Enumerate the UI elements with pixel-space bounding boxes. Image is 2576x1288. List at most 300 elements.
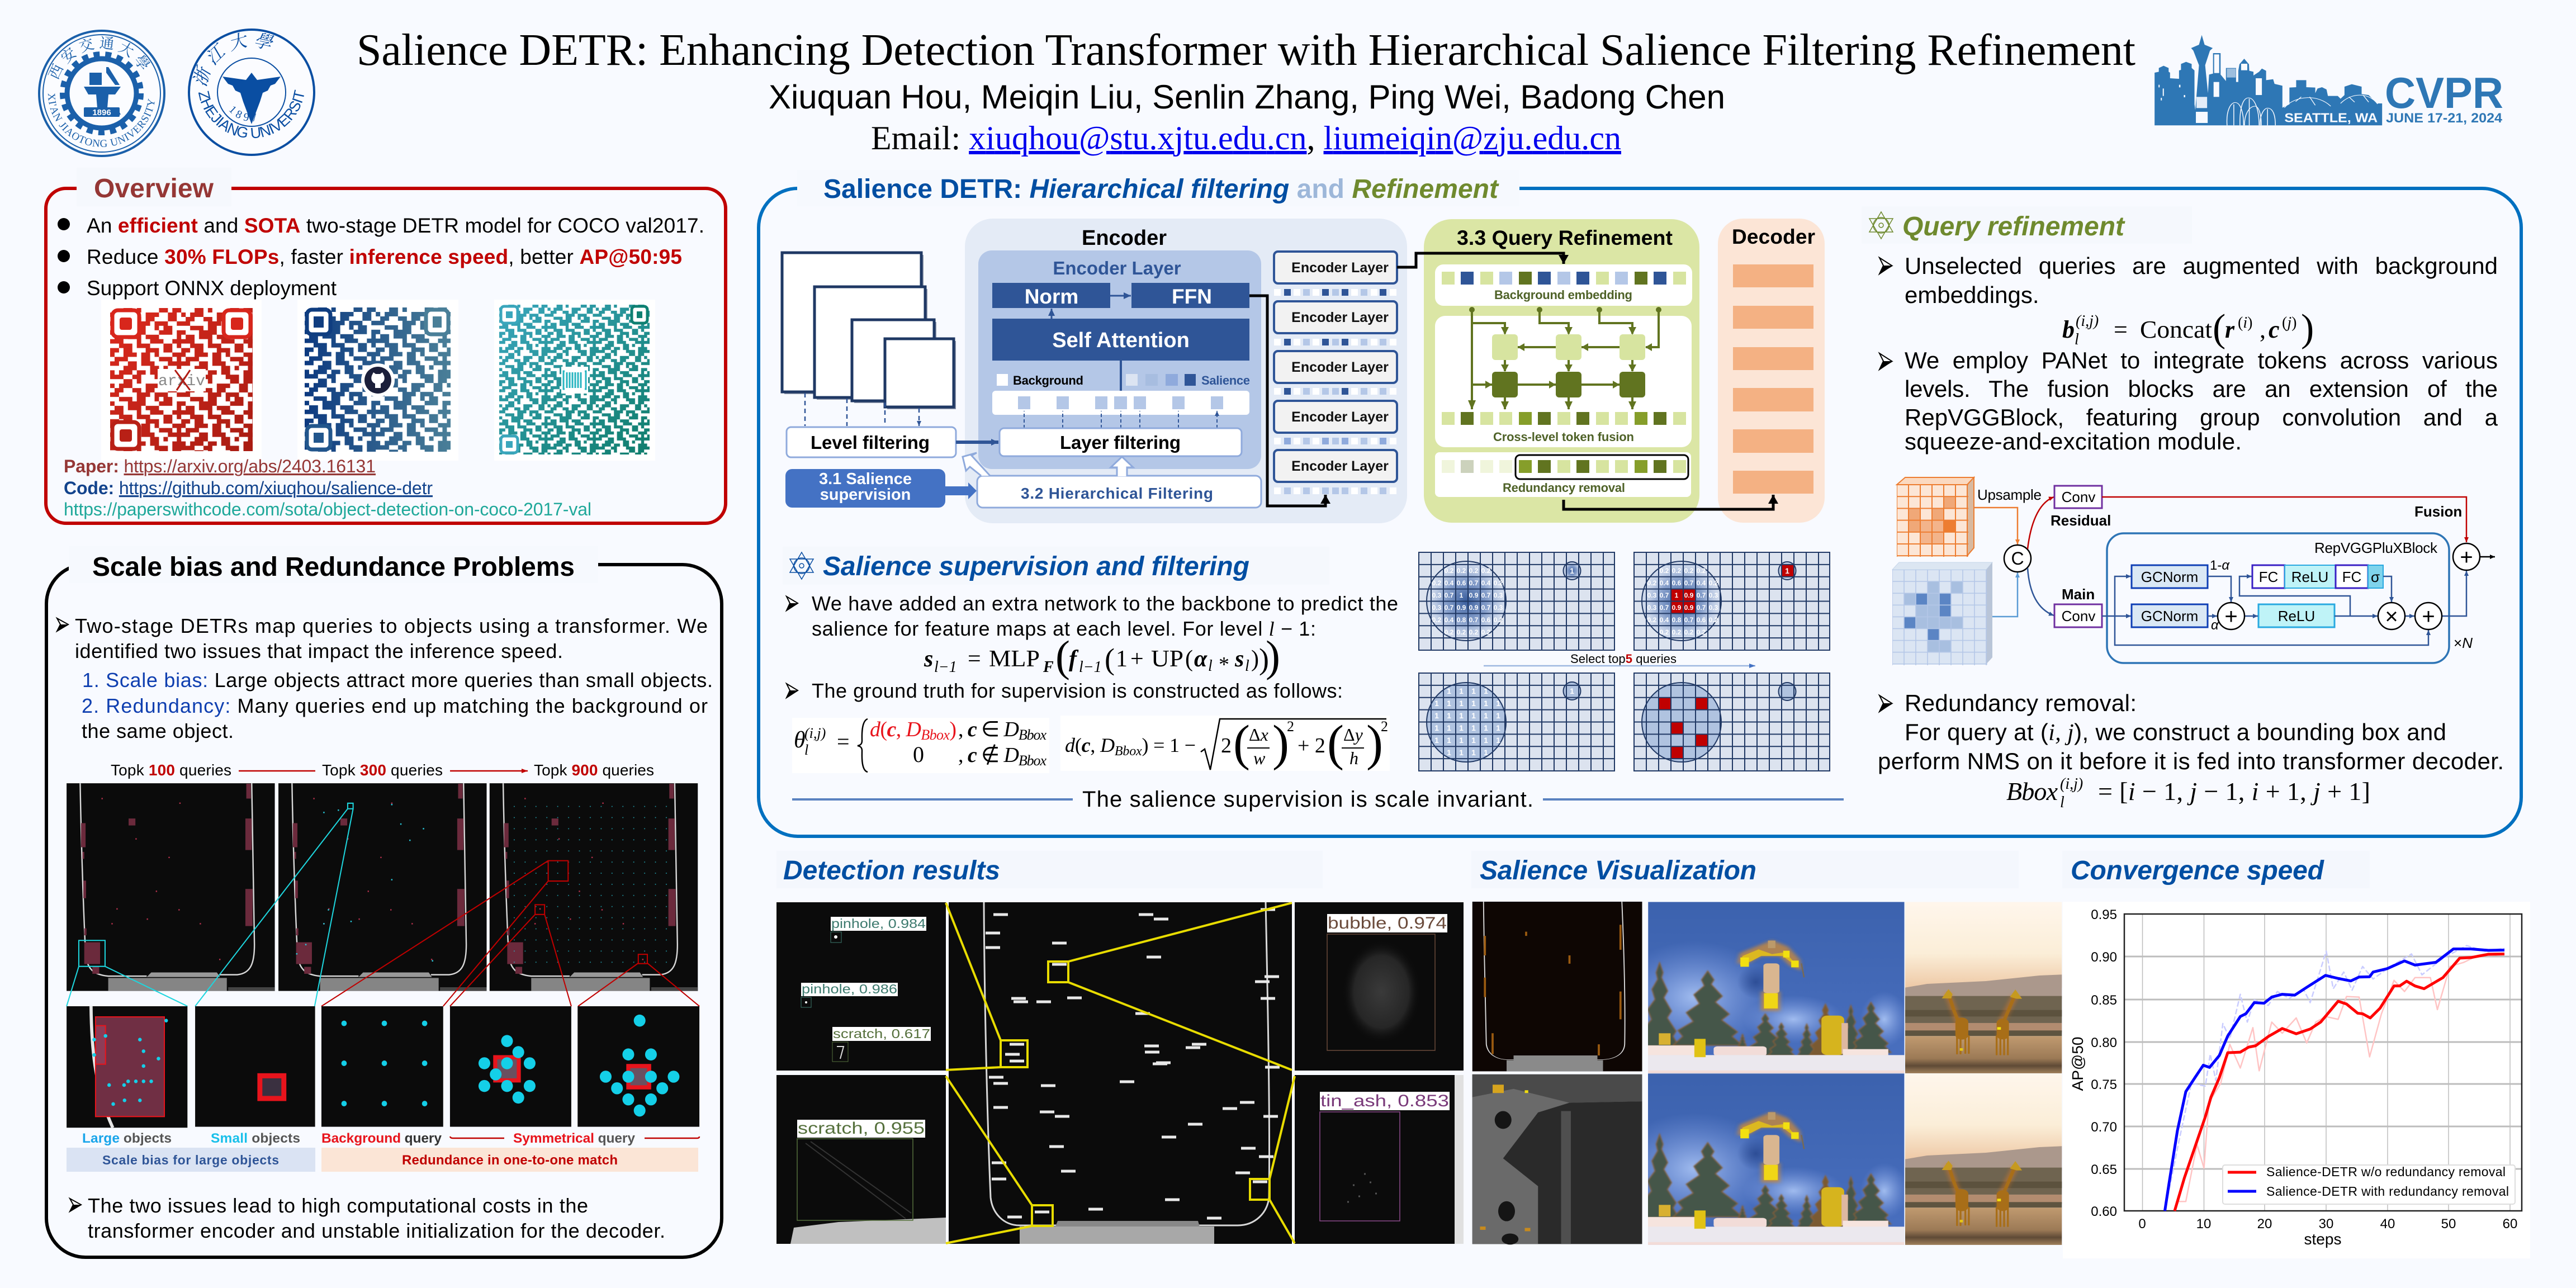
axis labels: AP@50 [2069,1037,2086,1091]
grid: salience values: 0.2 [1494,616,1503,624]
formula: distance: 2 [1381,718,1388,735]
grid: binary ground truth: 1 [1471,736,1476,745]
grid: salience values: 0.3 [1494,591,1503,599]
body text: RepVGGBlock, featuring group convolution and a [1905,404,2498,430]
grid: binary ground truth: 1 [1496,736,1500,745]
logo: Zhejiang University: 浙 江 大 學 [192,32,274,86]
formula: distance: = 1 − [1153,734,1196,756]
x tick labels [2138,1216,2517,1232]
grid: binary ground truth: 1 [1459,723,1464,732]
formula: bbox: Bbox [2006,777,2058,806]
token row [992,391,1249,415]
grid: binary ground truth: 1 [1484,723,1488,732]
axis labels [2069,1037,2341,1248]
formula: distance: ) [1142,734,1148,756]
block arrow: supervision to hierarchical [945,482,977,499]
formula: distance [1060,716,1390,771]
grid: salience values: 0.2 [1432,616,1442,624]
encoder layer detail: Self Attention [1052,329,1190,352]
conv main [2054,604,2102,627]
formula: background embedding: b [2062,316,2075,343]
panel: scale bias and redundance problems [46,546,722,1257]
links [64,456,591,519]
y tick labels: 0.90 [2091,950,2117,965]
formula: salience map [924,632,1280,680]
grid: salience values: 0.7 [1481,604,1491,612]
formula: bbox: l [2060,794,2064,811]
formula: distance: Δx [1249,724,1268,745]
formula: ground truth: Bbox [1019,752,1046,769]
redundancy removal: Redundancy removal [1503,481,1625,495]
closing text: The two issues lead to high computational costs in the [88,1194,588,1217]
logo: Xi'an Jiaotong University: 1896 [92,108,111,117]
body text [1879,253,2498,454]
formula: salience map: l [1245,657,1249,675]
box: 3.1 salience supervision [785,469,945,508]
crop: tin ash: tin_ash, 0.853 [1320,1092,1449,1110]
grid: binary ground truth: 1 [1447,748,1451,757]
grid: salience values: 0.2 [1481,567,1491,575]
legend: Salience [1201,373,1250,387]
grid: salience values: 0.2 [1494,579,1503,587]
redundancy removal [1435,452,1691,497]
formula: salience map: ( [1185,646,1193,672]
x tick labels: 20 [2257,1216,2272,1232]
y tick labels: 0.60 [2091,1204,2117,1219]
formula: salience map: l−1 [1079,659,1102,676]
logo: Xi'an Jiaotong University [38,30,165,157]
links: https://paperswithcode.com/sota/object-detection-on-coco-2017-val [64,499,591,519]
grid: random selection [1633,673,1830,771]
concat node: C [2011,548,2024,569]
formula: bbox: (i,j) [2060,775,2083,793]
formula: background embedding [2062,307,2314,350]
box: 3.2 hierarchical filtering: 3.2 Hierarchical Filtering [1021,485,1213,502]
formula: distance: ) [1272,716,1289,771]
encoder layer stack: Encoder Layer [1291,458,1389,474]
grid: salience values: 0.7 [1445,604,1454,612]
grid: salience values: 0.2 [1469,628,1479,636]
zoom indicators [946,903,1295,1243]
label: select top 5 queries: Select top5 queries [1570,652,1677,666]
formula: ground truth [792,718,1049,773]
diagram: fusion block: ×N [2454,634,2473,651]
intro text [57,614,713,742]
dashed arrows to level filtering [805,393,919,426]
crop: pinhole and scratch: pinhole, 0.986 [802,982,897,996]
bullet list: Reduce 30% FLOPs, faster inference speed, better AP@50:95 [87,245,682,268]
zoomed tile: symmetrical query 1 [450,1006,571,1127]
formula: background embedding: c [2269,316,2280,343]
encoder layer stack: Encoder Layer [1291,260,1389,276]
formula: distance: + 2 [1298,734,1325,757]
zoom boxes and lines [67,803,699,1006]
RepVGGPluXBlock: GCNorm [2141,569,2198,585]
crop: pinhole and scratch: pinhole, 0.984 [831,916,926,931]
grid: binary ground truth: 1 [1484,736,1488,745]
heading: salience visualization [1471,851,2019,888]
grid: binary ground truth: 1 [1447,736,1451,745]
cross-level token fusion: Cross-level token fusion [1493,430,1634,444]
diagram: fusion block: Main [2062,586,2095,603]
heading: Salience supervision and filtering [823,552,1249,581]
formula: salience map: ) [1251,646,1259,672]
encoder layer detail: Norm [1025,285,1078,308]
diagram: fusion block [1892,477,2495,665]
formula: ground truth: , c ∈ D [958,718,1019,741]
QR code: arXiv [101,300,262,461]
formula: salience map: ( [1055,632,1070,680]
grid: salience values: 0.3 [1494,604,1503,612]
formula: salience map: l [1208,657,1213,675]
RepVGGPluXBlock: FC [2259,569,2278,585]
summary bars: Redundance in one-to-one match [402,1153,618,1168]
encoder layer stack: Encoder Layer [1291,359,1389,375]
RepVGGPluXBlock: α [2211,618,2219,633]
body text: levels. The fusion blocks are an extension of the [1905,376,2498,402]
heading: detection results [776,851,1323,888]
heading [1862,206,2192,244]
x tick labels: 50 [2441,1216,2456,1232]
formula: background embedding: ) [2301,307,2314,350]
diagram: fusion block: Upsample [1977,486,2042,503]
formula: salience map: ( [1105,642,1115,676]
legend [997,373,1250,387]
grid: salience values: 0.8 [1457,616,1466,624]
grid: binary ground truth: 1 [1434,723,1439,732]
token rows [1274,289,1396,494]
formula: distance: d(c, D [1065,734,1115,756]
cube: feature [1892,562,1992,665]
formula: salience map: α [1194,646,1208,672]
query images [67,783,699,1128]
heading: overview: Overview [94,174,214,203]
grid: salience values: 0.6 [1457,579,1466,587]
encoder layer stack [1274,252,1397,494]
email line: Email: xiuqhou@stu.xjtu.edu.cn, liumeiqin@zju.edu.cn [871,120,1621,157]
grid: binary ground truth: 1 [1496,711,1500,720]
encoder layer stack: Encoder Layer [1291,409,1389,425]
grid: binary ground truth: 1 [1459,699,1464,708]
body text: Unselected queries are augmented with background [1905,253,2498,279]
heading: convergence speed [2062,851,2370,888]
body text: We have added an extra network to the backbone to predict the [812,592,1398,615]
box: 3.1 salience supervision: supervision [820,486,911,504]
grid: binary ground truth [1418,673,1615,771]
grid: binary ground truth: 1 [1447,686,1451,695]
grid: salience values: 0.4 [1445,579,1454,587]
formula: salience map: s [1234,646,1244,672]
panel: salience DETR [759,170,2530,1258]
grid: binary ground truth: 1 [1496,699,1500,708]
box: layer filtering [1000,428,1242,456]
panel: decoder: Decoder [1732,225,1815,248]
RepVGGPluXBlock: ReLU [2278,608,2315,624]
grid: binary ground truth: 1 [1484,711,1488,720]
crop: tin ash [1295,1075,1464,1244]
panel: salience visualization phone and metal [1472,902,1642,1244]
logo: Xi'an Jiaotong University: 西 安 交 通 大 學 [48,36,150,79]
grid: binary ground truth: 1 [1484,699,1488,708]
formula: ground truth: d(c, D [870,718,921,741]
authors: Xiuquan Hou, Meiqin Liu, Senlin Zhang, Ping Wei, Badong Chen [769,78,1725,116]
grid: binary ground truth: 1 [1459,711,1464,720]
bullet list: Support ONNX deployment [87,277,337,300]
x tick labels: 0 [2138,1216,2146,1232]
intro text: Two-stage DETRs map queries to objects using a transformer. We [75,614,708,637]
panel: convergence chart [2063,902,2530,1258]
logo: CVPR Seattle 2024: CVPR [2385,68,2503,117]
legend: Salience-DETR w/o redundancy removal [2266,1164,2506,1179]
RepVGGPluXBlock: RepVGGPluXBlock [2314,539,2438,556]
encoder layer stack: Encoder Layer [1291,310,1389,325]
body text: salience for feature maps at each level. For level l − 1: [812,617,1316,640]
scale invariant note: The salience supervision is scale invariant. [1082,787,1533,812]
axes [2124,914,2522,1211]
grid: binary ground truth: 1 [1434,736,1439,745]
grid: salience values: 0.6 [1481,616,1491,624]
cube: upsampled feature [1897,477,1974,557]
grid: salience values: 0.2 [1457,628,1466,636]
intro text: the same object. [82,719,234,742]
formula: background embedding: ( [2213,307,2225,350]
panel: decoder [1718,219,1825,523]
zoomed tile: background query [321,1006,443,1127]
grid: salience values: 0.2 [1445,567,1454,575]
logo: CVPR Seattle 2024: SEATTLE, WA [2284,111,2378,125]
grid: selected top salience [1633,552,1830,651]
grid: salience values: 1 [1570,566,1574,575]
heatmap: giraffes [1905,902,2062,1073]
grid: salience values: 0.7 [1481,591,1491,599]
grid: salience values: 0.9 [1469,591,1479,599]
closing text: transformer encoder and unstable initialization for the decoder. [88,1219,665,1242]
heading [783,547,1329,585]
box: level filtering [787,427,956,457]
formula: salience map: * [1219,653,1229,676]
grid: salience values: 0.3 [1432,591,1442,599]
formula: ground truth: θ [794,727,806,753]
RepVGGPluXBlock: + [2224,604,2238,629]
grid: salience values [1418,552,1615,651]
formula: salience map: l−1 [934,659,957,676]
heading: salience visualization: Salience Visualization [1480,856,1756,886]
formula: ground truth: (i,j) [804,725,826,741]
grid: binary ground truth: 1 [1471,723,1476,732]
body text: We employ PANet to integrate tokens across various [1905,347,2498,373]
grid: salience values: 0.3 [1432,604,1442,612]
summary bars: Scale bias for large objects [102,1153,279,1167]
formula: salience map: + [1130,646,1144,672]
redundancy text: Redundancy removal: [1905,690,2137,716]
curves [2165,946,2504,1211]
grid: binary ground truth: 1 [1459,736,1464,745]
formula: distance: 2 [1287,718,1294,735]
grid: binary ground truth: 1 [1447,699,1451,708]
logo: Xi'an Jiaotong University: XI'AN JIAOTONG UNIVERSITY [48,93,155,147]
grid: binary ground truth: 1 [1471,711,1476,720]
bullet list: An efficient and SOTA two-stage DETR model for COCO val2017. [87,214,704,237]
panel: detection results [776,902,1464,1244]
crop: pinhole and scratch: scratch, 0.617 [833,1026,930,1041]
grid: binary ground truth: 1 [1496,723,1500,732]
y tick labels: 0.95 [2091,907,2117,922]
logo: CVPR Seattle 2024 [2154,35,2503,126]
legend: Salience-DETR with redundancy removal [2266,1184,2509,1199]
panel: salience visualization photos [1614,902,2062,1245]
grid: binary ground truth: 1 [1484,686,1488,695]
RepVGGPluXBlock: FC [2342,569,2361,585]
section: query refinement [1862,206,2504,811]
grid: salience values: 0.7 [1469,579,1479,587]
summary bars [67,1148,698,1172]
conv residual: Conv [2062,489,2095,505]
crop: scratch large: scratch, 0.955 [798,1119,925,1138]
formula: distance: ( [1327,716,1344,771]
grid: binary ground truth: 1 [1459,748,1464,757]
formula: salience map: MLP [989,646,1040,672]
encoder layer detail: FFN [1172,285,1212,308]
formula: ground truth: , c ∉ D [958,744,1019,767]
intro text: identified two issues that impact the inference speed. [75,640,563,662]
RepVGGPluXBlock: + [2422,604,2435,629]
logo: Zhejiang University: 1897 [229,106,256,122]
topk labels and arrows: Topk 300 queries [322,761,443,779]
RepVGGPluXBlock: σ [2371,569,2380,585]
main detection image [949,902,1292,1244]
diagram: fusion block: Residual [2051,512,2111,529]
grid: salience values: 0.2 [1457,567,1466,575]
zoomed tile: large object [67,1006,187,1128]
QR code: papers with code [494,300,655,461]
heading: detection results: Detection results [783,856,1000,886]
body text: embeddings. [1905,282,2039,308]
topk labels and arrows [111,761,654,779]
RepVGGPluXBlock: GCNorm [2141,608,2198,624]
x tick labels: 40 [2380,1216,2395,1232]
formula: distance: h [1349,748,1358,768]
topk labels and arrows: Topk 900 queries [534,761,654,779]
grid: binary ground truth: 1 [1447,711,1451,720]
RepVGGPluXBlock: ReLU [2291,569,2328,585]
cross-level token fusion [1435,307,1692,447]
box: 3.1 salience supervision: 3.1 Salience [819,470,912,488]
grid: salience values: 0.4 [1481,579,1491,587]
grid: binary ground truth: 1 [1570,686,1574,695]
tile captions: Small objects [211,1131,300,1146]
RepVGGPluXBlock: 1-α [2210,558,2230,573]
heading: Query refinement [1902,212,2125,242]
formula: ground truth: 0 [913,742,924,767]
QR code: arXiv: arxiv [158,373,205,390]
y tick labels: 0.75 [2091,1077,2117,1092]
formula: bbox [2006,775,2370,811]
formula: salience map: ) [1266,632,1280,680]
connector: refinement to decoder [1564,495,1773,509]
tile captions: Background query [321,1131,442,1146]
crop: scratch large [776,1075,946,1244]
RepVGGPluXBlock: + [2460,545,2473,570]
grid: binary ground truth: 1 [1434,699,1439,708]
diagram: fusion block: Fusion [2414,503,2462,520]
panel: encoder: Encoder [1082,226,1167,250]
intro text: 1. Scale bias: Large objects attract more queries than small objects. [82,669,713,692]
grid: salience values: 0.2 [1445,628,1454,636]
redundancy text: perform NMS on it before it is fed into transformer decoder. [1878,748,2504,774]
links: Code: https://github.com/xiuqhou/salience-detr [64,478,433,498]
axis labels: steps [2304,1230,2341,1248]
formula: background embedding: Concat [2140,316,2212,343]
formula: distance: ) [1366,716,1383,771]
x tick labels: 10 [2196,1216,2211,1232]
formula: distance: Δy [1343,724,1363,745]
heatmap: metal part [1472,1074,1642,1244]
title: Salience DETR: Enhancing Detection Transformer with Hierarchical Salience Filtering Refinement [357,26,2135,75]
formula: salience map: UP [1151,646,1183,672]
grid: salience values: 0.9 [1469,604,1479,612]
formula: salience map: f [1069,646,1079,672]
y tick labels [2091,907,2117,1219]
heatmap: phone [1472,902,1642,1071]
grid: salience values: 0.9 [1457,604,1466,612]
tile captions [82,1131,699,1146]
heatmap: figure over trees [1614,902,1909,1073]
formula: salience map: s [924,646,933,672]
formula: background embedding: , [2260,316,2266,343]
background embedding [1435,264,1692,306]
arrow: level to layer filtering [956,441,998,444]
legend: Background [1013,373,1083,387]
formula: bbox: = [i − 1, j − 1, i + 1, j + 1] [2098,777,2370,806]
diagram: feature pyramid [782,253,956,409]
connector: FFN to encoder stack [1249,296,1325,506]
formula: ground truth: ) [949,718,956,741]
y tick labels: 0.85 [2091,993,2117,1008]
formula: salience map: = [968,646,981,672]
heading: scale bias: Scale bias and Redundance Problems [92,552,575,582]
redundancy text [1878,690,2504,774]
encoder layer detail: Encoder Layer [1053,258,1181,278]
formula: background embedding: = [2114,316,2128,343]
RepVGGPluXBlock [2102,533,2480,663]
box: level filtering: Level filtering [811,432,930,453]
heatmap: figure over trees 2 [1614,1073,1909,1245]
formula: background embedding: (i) [2238,314,2252,332]
crop: bubble: bubble, 0.974 [1328,914,1447,932]
formula: distance: Bbox [1115,744,1142,759]
legend [2223,1164,2515,1204]
body text: squeeze-and-excitation module. [1905,428,2242,454]
formula: distance: 2 [1221,734,1232,757]
grid: binary ground truth: 1 [1471,748,1476,757]
conv residual [2054,486,2102,508]
intro text: 2. Redundancy: Many queries end up matching the background or [82,694,708,717]
formula: salience map: F [1043,659,1054,676]
formula: background embedding: r [2225,316,2235,343]
heading: overview [77,168,231,206]
panel: encoder [963,219,1407,523]
connector: encoder to refinement [1397,253,1564,267]
closing text [70,1194,665,1242]
heading: convergence speed: Convergence speed [2071,856,2325,886]
encoder layer detail [978,250,1261,469]
formula: background embedding: (j) [2282,314,2296,332]
grid: salience values: 0.2 [1481,628,1491,636]
grid: salience values: 1 [1460,591,1464,599]
grid: binary ground truth: 1 [1484,748,1488,757]
formula: ground truth: Bbox [1019,727,1046,743]
background embedding: Background embedding [1494,288,1632,302]
